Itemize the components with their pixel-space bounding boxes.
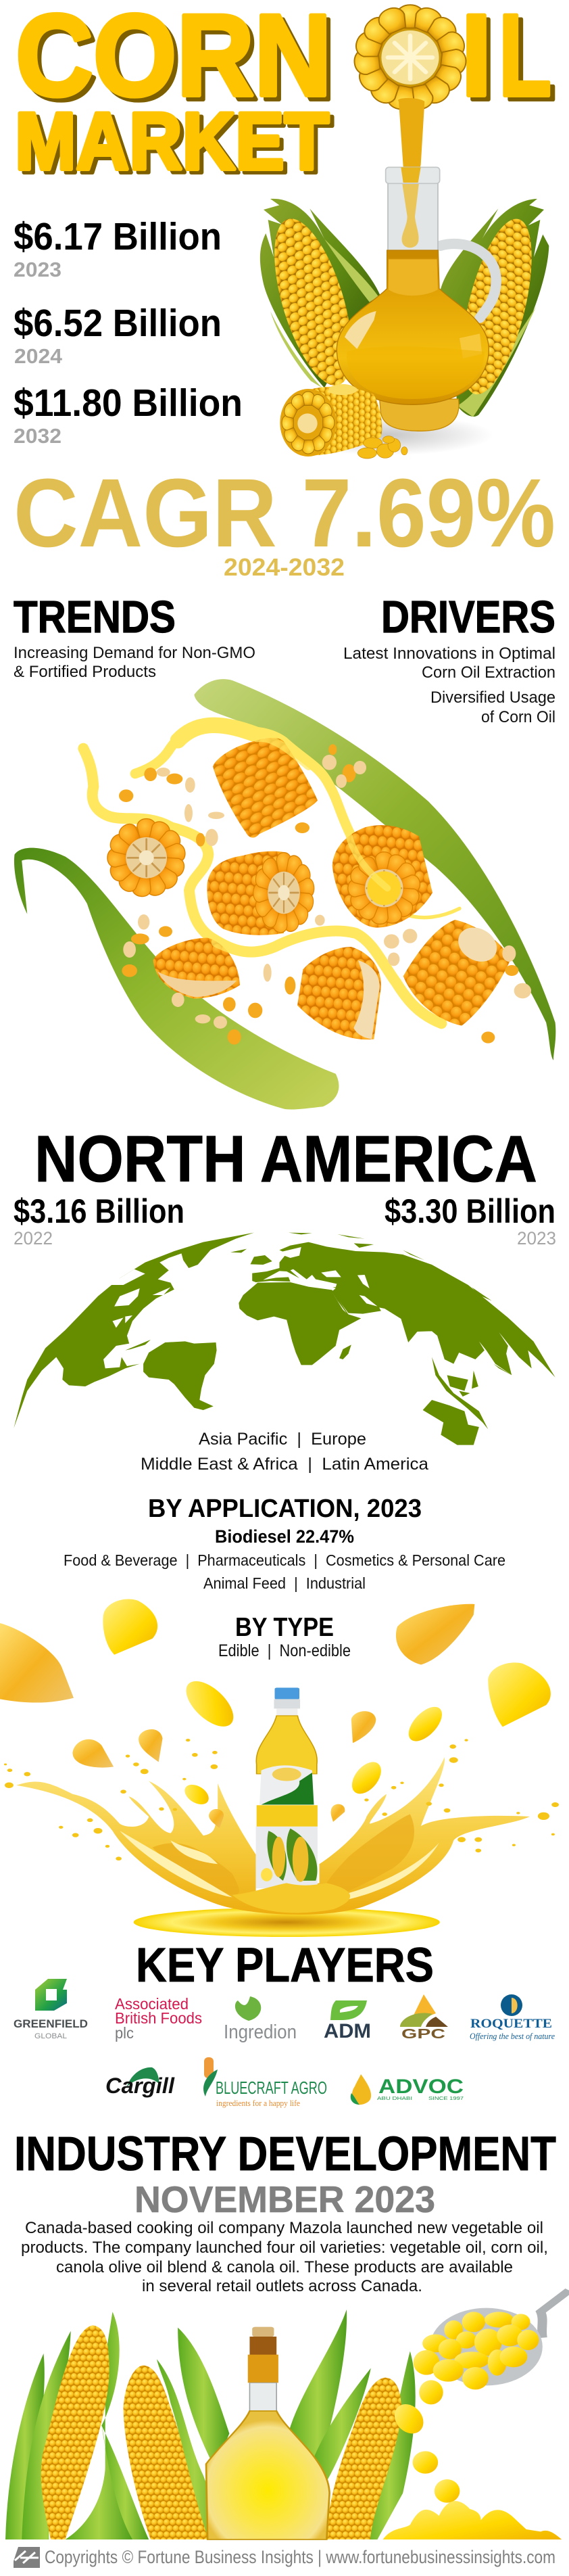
loose kernels bbox=[357, 436, 407, 459]
southeast asia islands bbox=[432, 1357, 512, 1429]
africa bbox=[239, 1282, 361, 1365]
bottle middle oil bbox=[257, 1805, 318, 1827]
heading: key players: KEY PLAYERS bbox=[136, 1939, 434, 1992]
right corn leaf bbox=[194, 679, 555, 1060]
oil bottle bbox=[256, 1688, 318, 1888]
label corn mark bbox=[272, 1768, 301, 1781]
splash shading bbox=[153, 1814, 414, 1900]
bottle cap bbox=[275, 1688, 299, 1700]
development paragraph: products. The company launched four oil varieties: vegetable oil, corn oil, bbox=[21, 2239, 548, 2257]
illustration: bottle in oil splash with kernels bbox=[0, 1599, 559, 1937]
market value 2024: $6.52 Billion bbox=[14, 302, 222, 345]
trends text: Increasing Demand for Non-GMO bbox=[14, 644, 255, 662]
oil in neck falling bbox=[402, 183, 419, 248]
seas, lakes and bays bbox=[109, 1247, 377, 1328]
logo: Roquette: Offering the best of nature bbox=[470, 2031, 555, 2041]
development paragraph: canola olive oil blend & canola oil. These products are available bbox=[56, 2258, 513, 2276]
logo: ADM bbox=[324, 2000, 371, 2042]
right corn ear bbox=[447, 212, 546, 401]
spoon handle bbox=[541, 2291, 569, 2338]
logo: Advoc bbox=[351, 2074, 464, 2105]
label badge bbox=[261, 1868, 272, 1881]
footer logo mark bbox=[14, 2547, 40, 2568]
spoon bowl bbox=[430, 2308, 543, 2385]
bottle collar bbox=[274, 1699, 300, 1708]
husk lower highlights bbox=[270, 239, 536, 417]
corn ear right bbox=[326, 2378, 401, 2539]
corn butter top bbox=[329, 384, 358, 395]
market value 2024: 2024 bbox=[14, 344, 63, 368]
bottle lower label bbox=[256, 1827, 318, 1888]
oil ribbons bbox=[83, 725, 460, 1023]
application list: Animal Feed | Industrial bbox=[203, 1574, 366, 1592]
world map bbox=[14, 1233, 555, 1445]
drivers text: of Corn Oil bbox=[481, 708, 555, 726]
centre corn chunk bbox=[207, 851, 315, 935]
oil stream in lip bbox=[401, 167, 421, 183]
logo: Advoc: SINCE 1997 bbox=[428, 2097, 464, 2101]
jug body oil bbox=[337, 250, 489, 404]
flying kernels bbox=[72, 1677, 449, 1828]
jug foot bbox=[380, 399, 459, 431]
logo: Advoc: ABU DHABI bbox=[377, 2097, 412, 2101]
trends text bbox=[14, 644, 255, 681]
market value 2023 bbox=[14, 215, 222, 281]
market value 2024 bbox=[14, 302, 222, 368]
logo: GPC: GPC bbox=[401, 2027, 445, 2042]
splash highlights bbox=[120, 1831, 439, 1904]
illustration: corn ears, oil bottle and spoon bbox=[5, 2291, 569, 2539]
trends text: & Fortified Products bbox=[14, 663, 156, 681]
neck oil band bbox=[389, 259, 438, 296]
logo: Bluecraft Agro bbox=[203, 2057, 327, 2108]
oil over corn bbox=[216, 738, 441, 1023]
logo: Ingredion: Ingredion bbox=[224, 2021, 297, 2043]
cut corn piece bbox=[307, 387, 382, 455]
left corn chunk bbox=[107, 819, 187, 898]
north america value 2023: 2023 bbox=[517, 1228, 556, 1248]
type list: Edible | Non-edible bbox=[218, 1641, 351, 1660]
corn ear middle bbox=[124, 2366, 209, 2539]
label green bbox=[262, 1773, 314, 1805]
market value 2032 bbox=[14, 381, 243, 448]
north america value 2022: $3.16 Billion bbox=[14, 1192, 184, 1230]
lower-right corn chunk bbox=[403, 920, 510, 1026]
bottle upper label bbox=[259, 1765, 314, 1805]
logo: GPC bbox=[400, 1994, 448, 2042]
falling kernels bbox=[391, 2380, 460, 2503]
south america bbox=[143, 1341, 217, 1410]
logo: Greenfield Global: GREENFIELD bbox=[14, 2017, 88, 2030]
loose kernels bbox=[119, 744, 531, 1045]
neck oil surface bbox=[388, 251, 438, 258]
heading: by application: BY APPLICATION, 2023 bbox=[148, 1495, 422, 1523]
logo: Advoc: ADVOC bbox=[378, 2076, 464, 2098]
market value 2032: 2032 bbox=[14, 424, 61, 448]
application list: Food & Beverage | Pharmaceuticals | Cosmetics & Personal Care bbox=[64, 1551, 505, 1569]
corn leaves behind splash bbox=[14, 679, 555, 1110]
logo: Greenfield Global bbox=[14, 1979, 88, 2040]
north america value 2022: 2022 bbox=[14, 1228, 53, 1248]
back leaves bbox=[178, 2310, 416, 2539]
bottle neck bbox=[276, 1708, 297, 1716]
CAGR period: 2024-2032 bbox=[224, 553, 345, 581]
central america and islands bbox=[125, 1340, 151, 1351]
logo: Associated British Foods: Associated bbox=[115, 1995, 189, 2013]
oil pool bbox=[134, 1908, 440, 1937]
top corn chunk bbox=[213, 738, 318, 838]
kernel far right bbox=[488, 1662, 551, 1727]
logo: ADM: ADM bbox=[324, 2020, 371, 2042]
logo: Cargill: Cargill bbox=[105, 2074, 175, 2098]
logo: Associated British Foods: British Foods bbox=[115, 2009, 202, 2027]
regions list: Asia Pacific | Europe bbox=[199, 1430, 366, 1449]
development paragraph: Canada-based cooking oil company Mazola launched new vegetable oil bbox=[25, 2219, 543, 2237]
drivers text: Corn Oil Extraction bbox=[422, 663, 555, 682]
madagascar bbox=[339, 1344, 351, 1359]
bottle cap dark bbox=[249, 2337, 276, 2355]
market value 2032: $11.80 Billion bbox=[14, 381, 243, 425]
drivers text: Latest Innovations in Optimal bbox=[343, 645, 555, 663]
title shadow bbox=[19, 0, 556, 190]
bottle upper oil bbox=[256, 1716, 317, 1774]
uk and small islands bbox=[230, 1233, 492, 1301]
north america landmass bbox=[14, 1233, 254, 1428]
left husk bbox=[260, 199, 381, 388]
eurasia bbox=[252, 1242, 555, 1378]
right corn chunk bbox=[332, 825, 432, 928]
logo: Ingredion bbox=[224, 1996, 297, 2043]
label corn ears bbox=[267, 1829, 317, 1882]
title: Corn Oil Market bbox=[15, 0, 556, 190]
drivers text bbox=[343, 645, 555, 726]
spoon corn kernels bbox=[414, 2312, 539, 2389]
kernel top left bbox=[103, 1599, 157, 1655]
biodiesel share: Biodiesel 22.47% bbox=[215, 1526, 354, 1547]
bottle gold band bbox=[248, 2355, 278, 2383]
bottle glass neck bbox=[249, 2383, 276, 2411]
regions list bbox=[141, 1430, 428, 1474]
splash front bbox=[232, 1883, 350, 1913]
drivers text: Diversified Usage bbox=[430, 688, 555, 707]
left corn ear bbox=[259, 210, 368, 394]
ground shadow bbox=[282, 415, 493, 455]
heading: by type: BY TYPE bbox=[235, 1613, 334, 1642]
corn ear left bbox=[41, 2325, 109, 2539]
north america value 2023 bbox=[385, 1192, 556, 1248]
application list bbox=[64, 1551, 505, 1592]
illustration: oil jug with corn cobs bbox=[259, 98, 549, 459]
logo: Bluecraft Agro: ingredients for a happy life bbox=[216, 2098, 300, 2108]
logo: Associated British Foods: plc bbox=[115, 2024, 134, 2042]
logo: Bluecraft Agro: BLUECRAFT AGRO bbox=[216, 2078, 327, 2098]
logo: Associated British Foods bbox=[115, 1995, 202, 2042]
bottle oil body bbox=[206, 2411, 330, 2539]
title letters bbox=[15, 0, 551, 187]
heading: trends: TRENDS bbox=[14, 592, 176, 642]
jug neck glass bbox=[388, 183, 438, 255]
kernel pile bbox=[383, 2501, 562, 2539]
illustration: corn chunks and oil splash bbox=[83, 725, 531, 1045]
title shadow: MARKET bbox=[19, 99, 333, 190]
logo: Roquette bbox=[470, 1994, 555, 2041]
large kernel right bbox=[396, 1604, 474, 1664]
australia bbox=[423, 1400, 479, 1445]
oil bottle bbox=[206, 2327, 330, 2539]
date: November 2023: NOVEMBER 2023 bbox=[134, 2178, 435, 2220]
jug highlights bbox=[345, 311, 376, 349]
title letters: MARKET bbox=[15, 96, 329, 187]
development paragraph: in several retail outlets across Canada. bbox=[142, 2277, 422, 2295]
jug handle bbox=[441, 243, 496, 318]
oil stream bbox=[398, 98, 424, 248]
splash crown bbox=[16, 1757, 530, 1915]
north america value 2022 bbox=[14, 1192, 184, 1248]
market value 2023: $6.17 Billion bbox=[14, 215, 222, 258]
logo: Roquette: ROQUETTE bbox=[470, 2017, 552, 2031]
lower-left corn chunk bbox=[153, 938, 240, 999]
development paragraph bbox=[21, 2219, 548, 2295]
jug lip bbox=[386, 167, 440, 183]
cut end of corn bbox=[280, 389, 337, 456]
icon: corn slice as letter O bbox=[353, 4, 468, 112]
middle ear front leaf bbox=[157, 2359, 232, 2539]
right husk bbox=[439, 199, 549, 417]
market value 2023: 2023 bbox=[14, 258, 61, 281]
bottle cork bbox=[252, 2327, 274, 2337]
left corn leaf bbox=[14, 848, 339, 1110]
left husk leaves bbox=[5, 2312, 149, 2539]
oil droplets bbox=[4, 1739, 559, 1860]
lower-centre corn chunk bbox=[297, 947, 381, 1039]
large kernel left bbox=[0, 1623, 74, 1703]
logo: Greenfield Global: GLOBAL bbox=[34, 2032, 67, 2040]
regions list: Middle East & Africa | Latin America bbox=[141, 1455, 428, 1474]
